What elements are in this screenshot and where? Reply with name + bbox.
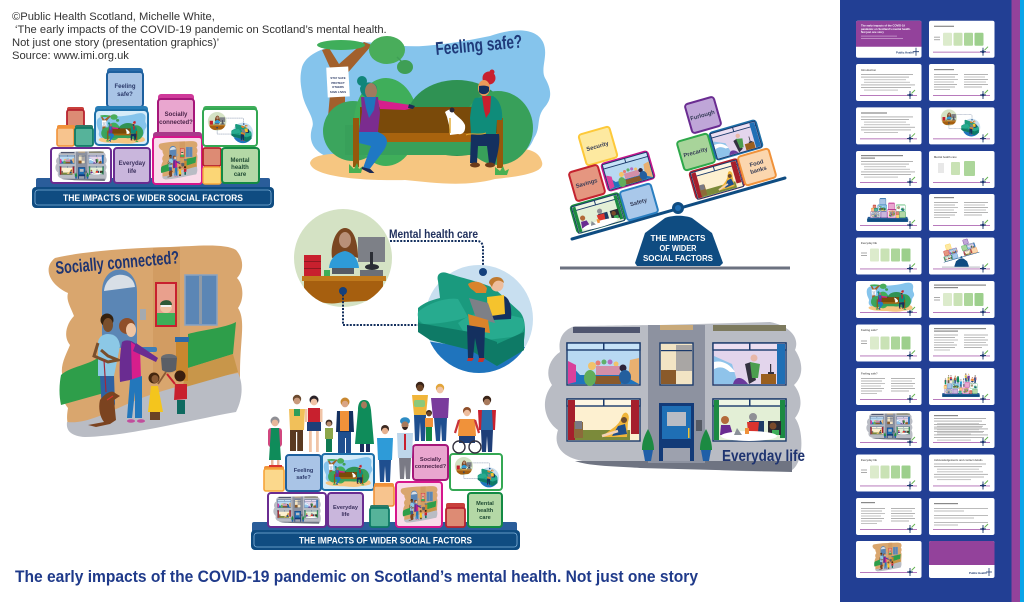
- see-saw block labels: Savings: [575, 178, 598, 190]
- block label: mental health care: care: [479, 515, 491, 521]
- slide 22: [929, 454, 994, 492]
- slide 8: Mental health care: [934, 155, 957, 159]
- slide 23: [856, 498, 922, 535]
- fulcrum label: THE IMPACTS: [650, 233, 706, 243]
- see-saw block labels: [575, 110, 768, 208]
- scene: socially connected: [49, 246, 242, 437]
- heading: feeling safe: Feeling safe?: [435, 30, 523, 59]
- slide 1: title slide: Public Health: [896, 51, 914, 55]
- slide 2: [929, 21, 994, 58]
- block label: socially connected: Socially: [165, 112, 188, 118]
- credit text: ©Public Health Scotland, Michelle White,: [12, 11, 215, 23]
- fulcrum label: OF WIDER: [660, 243, 697, 253]
- slide 6: mental health care image: [929, 107, 994, 144]
- block label: feeling safe: safe?: [296, 475, 311, 481]
- block label: everyday life: life: [128, 169, 137, 175]
- slide 11: Everyday life: [861, 241, 878, 245]
- slide 9: block stack image: [856, 194, 922, 231]
- slide 8: [929, 151, 994, 188]
- main title: The early impacts of the COVID-19 pandemic on Scotland’s mental health. Not just one story: [15, 567, 698, 586]
- slide 22: Acknowledgements and contact details: [934, 458, 983, 462]
- heading: everyday life: Everyday life: [722, 448, 805, 465]
- see-saw block labels: Furlough: [690, 110, 716, 122]
- see-saw: impacts of wider social factors: [560, 96, 790, 270]
- slide 19: everyday life image: [856, 411, 922, 448]
- fulcrum label: SOCIAL FACTORS: [643, 253, 713, 263]
- slide 25: socially connected image: [856, 541, 922, 578]
- see-saw block labels: Food: [749, 159, 765, 169]
- block stack: the impacts of wider social factors: [32, 68, 274, 208]
- slide 4: [929, 64, 994, 101]
- scene: mental health care: [294, 209, 540, 380]
- slide 16: [929, 324, 994, 362]
- slide 21: Everyday life: [861, 458, 878, 462]
- slide 15: [856, 324, 922, 362]
- slide 1: title slide: pandemic on Scotland’s mental health.: [861, 27, 911, 31]
- block label: socially connected: connected?: [415, 464, 447, 470]
- slide 7: [856, 151, 922, 188]
- block label: feeling safe: Feeling: [114, 84, 136, 90]
- credit text: ‘The early impacts of the COVID-19 pandemic on Scotland’s mental health.: [15, 24, 387, 36]
- slide 1: title slide: Not just one story: [861, 30, 884, 34]
- block label: everyday life: life: [341, 512, 350, 518]
- see-saw block labels: Precarity: [683, 147, 709, 159]
- slide 26: closing slide: [929, 541, 994, 578]
- block label: mental health care: Mental: [476, 501, 494, 507]
- slide 3: Introduction: [861, 68, 877, 72]
- block label: mental health care: health: [231, 165, 249, 171]
- block label: mental health care: care: [234, 172, 247, 178]
- heading: socially connected: Socially connected?: [55, 247, 180, 278]
- slide 21: [856, 454, 922, 492]
- slide 17: [856, 368, 922, 405]
- slide 12: see-saw image: [929, 238, 994, 274]
- slide 14: [929, 281, 994, 318]
- panel: presentation slides: [840, 0, 1024, 602]
- slide 18: people on blocks image: [929, 368, 994, 405]
- see-saw block labels: banks: [750, 166, 768, 176]
- slide 15: Feeling safe?: [861, 328, 878, 332]
- scene: feeling safe: [300, 30, 550, 184]
- fulcrum label: [643, 233, 713, 263]
- slide 5: [856, 107, 922, 144]
- slide 26: closing slide: Public Health: [969, 571, 987, 575]
- block label: socially connected: Socially: [420, 457, 442, 463]
- block label: everyday life: Everyday: [333, 505, 359, 511]
- block label: feeling safe: safe?: [117, 92, 133, 98]
- see-saw block labels: Safety: [630, 198, 649, 208]
- slide 1: title slide: [856, 21, 922, 58]
- slide 13: feeling safe image: [856, 281, 922, 318]
- heading: mental health care: Mental health care: [389, 227, 478, 241]
- block label: mental health care: health: [477, 508, 494, 514]
- slide 24: [929, 498, 994, 535]
- credit text: Not just one story (presentation graphics)’: [12, 37, 219, 49]
- block label: everyday life: Everyday: [119, 161, 146, 167]
- people on block stack: [251, 382, 520, 550]
- platform label: THE IMPACTS OF WIDER SOCIAL FACTORS: [299, 536, 472, 546]
- block label: mental health care: Mental: [230, 158, 250, 164]
- see-saw block labels: Security: [586, 141, 610, 153]
- slide 1: title slide: The early impacts of the COVID-19: [861, 24, 905, 28]
- scene: everyday life: [545, 322, 805, 472]
- slide 17: Feeling safe?: [861, 372, 878, 376]
- slide 10: [929, 194, 994, 231]
- block label: feeling safe: Feeling: [294, 468, 314, 474]
- slide 3: [856, 64, 922, 101]
- slide 20: [929, 411, 994, 448]
- block label: socially connected: connected?: [159, 120, 193, 126]
- credit text: Source: www.imi.org.uk: [12, 50, 129, 62]
- platform label: THE IMPACTS OF WIDER SOCIAL FACTORS: [63, 193, 243, 203]
- slide 11: [856, 238, 922, 274]
